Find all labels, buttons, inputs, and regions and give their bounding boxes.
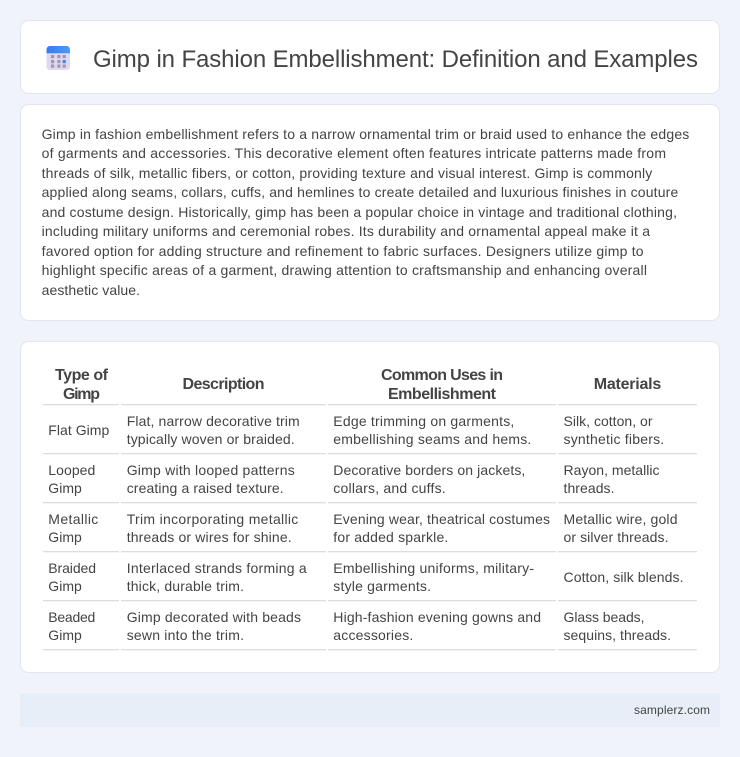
table row: braided gimp: Cotton, silk blends.: [564, 569, 684, 585]
table row: beaded gimp: sequins, threads.: [564, 627, 671, 643]
table row: metallic gimp: Evening wear, theatrical costumes: [333, 511, 550, 527]
table header row: [55, 367, 661, 403]
table row: flat gimp: [48, 413, 664, 447]
table row: looped gimp: [48, 462, 660, 496]
table row: beaded gimp: [48, 609, 671, 643]
table row: braided gimp: Embellishing uniforms, military-: [333, 560, 534, 576]
text block: definition paragraph: favored option for adding structure and refinement to fabric surfaces. Designers utilize gimp to: [42, 243, 644, 259]
table row: braided gimp: Gimp: [48, 578, 82, 594]
table row: flat gimp: Silk, cotton, or: [564, 413, 653, 429]
table row: braided gimp: thick, durable trim.: [127, 578, 244, 594]
table row: metallic gimp: [48, 511, 678, 545]
text block: definition paragraph: highlight specific areas of a garment, drawing attention to craftsmanship and enhancing overall: [42, 262, 647, 278]
table row: beaded gimp: Gimp: [48, 627, 82, 643]
text block: definition paragraph: and costume design. Historically, gimp has been a popular choice in vintage and traditional clothing,: [42, 204, 677, 220]
text block: definition paragraph: threads of silk, metallic fibers, or cotton, providing texture and visual interest. Gimp is commonly: [42, 165, 652, 181]
table row: braided gimp: style garments.: [333, 578, 431, 594]
table row: metallic gimp: Metallic: [48, 511, 98, 527]
table row: beaded gimp: accessories.: [333, 627, 413, 643]
text block: definition paragraph: aesthetic value.: [42, 282, 140, 298]
icon: calendar: [46, 46, 70, 70]
table row: metallic gimp: Trim incorporating metallic: [127, 511, 298, 527]
table row: looped gimp: Gimp: [48, 480, 82, 496]
panel: gimp types table: [20, 342, 720, 672]
table row: beaded gimp: Glass beads,: [564, 609, 644, 625]
table row: beaded gimp: High-fashion evening gowns and: [333, 609, 541, 625]
table row: looped gimp: collars, and cuffs.: [333, 480, 446, 496]
table row: looped gimp: Gimp with looped patterns: [127, 462, 295, 478]
text block: definition paragraph: of garments and accessories. This decorative element often features intricate patterns made from: [42, 145, 666, 161]
table row: flat gimp: Flat Gimp: [48, 422, 110, 438]
table row: looped gimp: threads.: [564, 480, 614, 496]
table row: looped gimp: Rayon, metallic: [564, 462, 660, 478]
table row: flat gimp: Flat, narrow decorative trim: [127, 413, 300, 429]
table header row: Type of: [55, 367, 109, 384]
table row: metallic gimp: Metallic wire, gold: [564, 511, 678, 527]
footer source text: samplerz.com: [634, 703, 710, 717]
table header row: Gimp: [63, 386, 100, 403]
footer bar: [20, 693, 720, 727]
table row: metallic gimp: threads or wires for shine.: [127, 529, 292, 545]
table header row: Embellishment: [388, 386, 497, 403]
text block: definition paragraph: including military uniforms and ceremonial robes. Its durability and ornamental appeal make it a: [42, 223, 650, 239]
table row: flat gimp: embellishing seams and hems.: [333, 431, 531, 447]
table row: metallic gimp: Gimp: [48, 529, 82, 545]
text block: definition paragraph: [42, 126, 689, 298]
table row: looped gimp: creating a raised texture.: [127, 480, 284, 496]
table row: beaded gimp: Beaded: [48, 609, 95, 625]
table row: braided gimp: Braided: [48, 560, 96, 576]
table row: looped gimp: Decorative borders on jackets,: [333, 462, 525, 478]
text block: definition paragraph: Gimp in fashion embellishment refers to a narrow ornamental trim or braid used to enhance the edges: [42, 126, 689, 142]
title: Gimp in Fashion Embellishment: Definition and Examples: [93, 46, 698, 73]
table row: braided gimp: Interlaced strands forming a: [127, 560, 307, 576]
table row: flat gimp: synthetic fibers.: [564, 431, 664, 447]
table row: metallic gimp: or silver threads.: [564, 529, 668, 545]
table header row: Description: [182, 376, 264, 393]
table row: flat gimp: typically woven or braided.: [127, 431, 295, 447]
table row: looped gimp: Looped: [48, 462, 95, 478]
table header row: Common Uses in: [381, 367, 503, 384]
table header row: Materials: [594, 376, 661, 393]
panel: introduction: [20, 104, 720, 320]
table row: braided gimp: [48, 560, 684, 594]
text block: definition paragraph: applied along seams, collars, cuffs, and hemlines to create detailed and luxurious finishes in couture: [42, 184, 679, 200]
table row: beaded gimp: Gimp decorated with beads: [127, 609, 301, 625]
table row: metallic gimp: for added sparkle.: [333, 529, 448, 545]
table row: beaded gimp: sewn into the trim.: [127, 627, 244, 643]
table row: flat gimp: Edge trimming on garments,: [333, 413, 514, 429]
panel: title header: [20, 20, 720, 94]
